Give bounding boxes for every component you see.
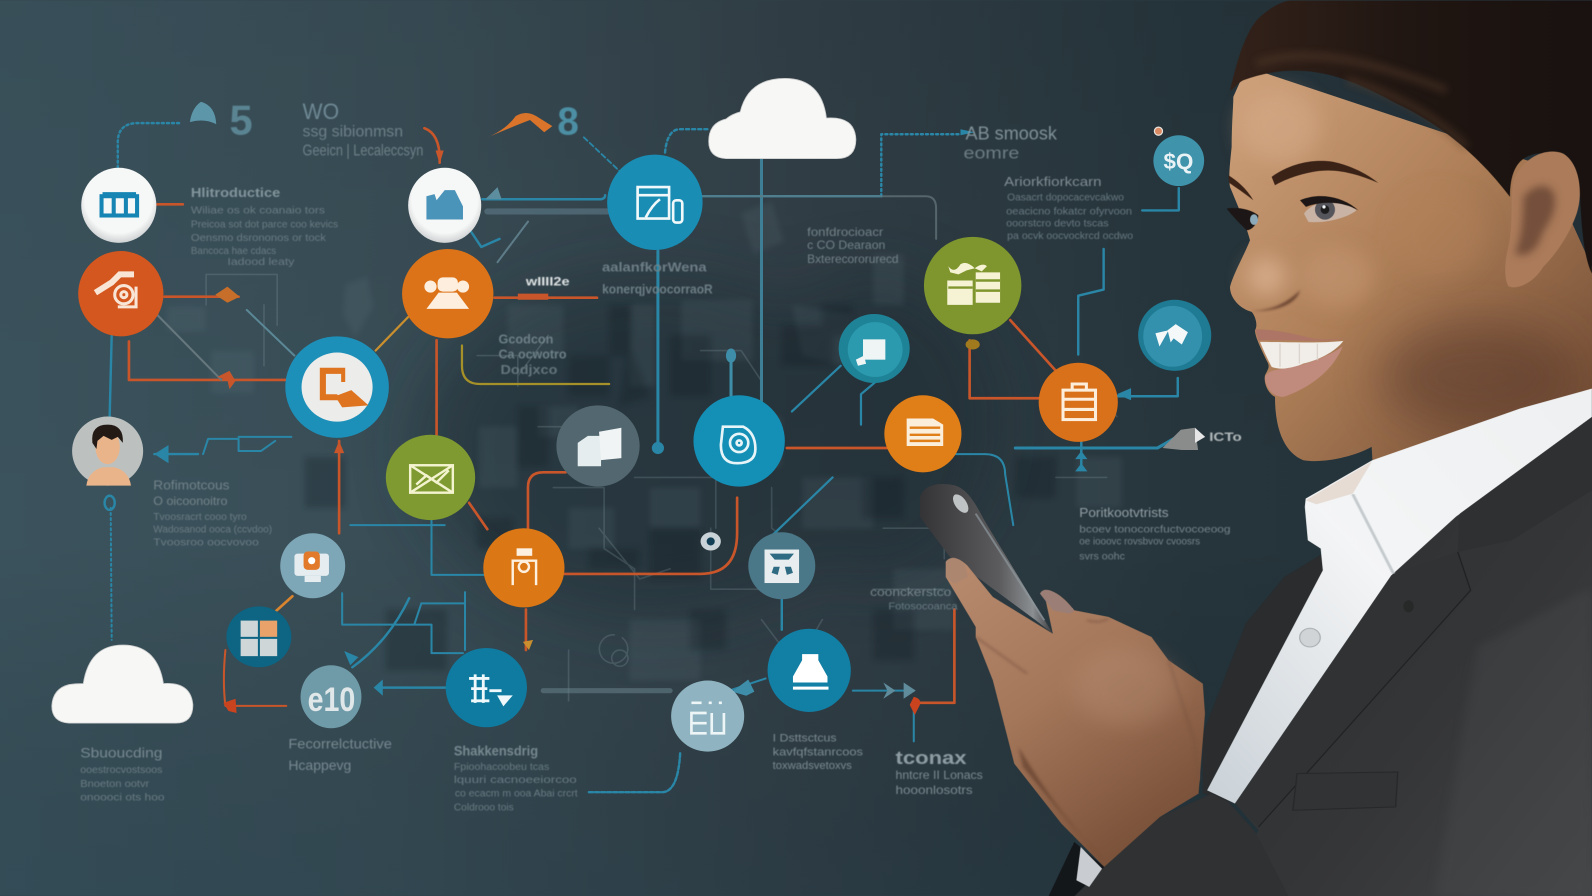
node: green files bbox=[924, 237, 1021, 334]
icon: numeral: e10 bbox=[308, 681, 355, 719]
text block: weight caption: toxwadsvetoxvs bbox=[773, 760, 852, 772]
node: teal picture bbox=[1138, 300, 1211, 371]
arrow heads and small markers bbox=[105, 102, 1205, 715]
icon: window grid bbox=[241, 621, 277, 656]
text block: upper centre: c CO Dearaon bbox=[807, 238, 885, 252]
node: pale database bbox=[671, 681, 744, 752]
text block: near phone: Fotosocoanca bbox=[888, 601, 958, 612]
small label: near grey marker: ICTo bbox=[1209, 430, 1242, 444]
text block: left lower: O oicoonoitro bbox=[153, 494, 228, 508]
hair bbox=[1230, 0, 1592, 274]
icon: weight bbox=[793, 654, 828, 690]
text block: introduction: Bancoca hae cdacs bbox=[191, 246, 276, 257]
node: grey-teal screen bbox=[748, 532, 815, 599]
connector lines bbox=[105, 102, 1205, 792]
node: orange scanner bbox=[483, 528, 565, 607]
text block: upper centre: Bxterecororurecd bbox=[807, 252, 899, 266]
text block: pale number caption bbox=[288, 737, 392, 774]
text block: centre left: Gcodcon bbox=[499, 331, 553, 346]
ear bbox=[1505, 152, 1580, 287]
text block: top note bbox=[303, 99, 423, 160]
orange connectors bbox=[129, 128, 1056, 706]
text block: introduction: Preicoa sot dot parce coo kevics bbox=[191, 220, 338, 231]
text block: left lower: Wadosanod ooca (ccvdoo) bbox=[153, 524, 272, 535]
text block: right of phone: bcoev tonocorcfuctvocoeoog bbox=[1079, 524, 1231, 535]
icon: scanner bbox=[513, 550, 536, 585]
jacket and shirt bbox=[1049, 389, 1592, 896]
text block: under bottom cloud: Bnoeton ootvr bbox=[80, 779, 150, 790]
node: grey files bbox=[556, 405, 640, 487]
text block: right of phone bbox=[1079, 505, 1231, 563]
sleeve bbox=[1074, 794, 1289, 896]
icon: person bbox=[86, 425, 131, 486]
text block: tconax: hntcre II Lonacs bbox=[896, 768, 983, 782]
text block: tools caption: co ecacm m ooa Abai crcrt bbox=[455, 788, 578, 799]
icon: clipboard bbox=[1063, 384, 1096, 420]
cloud: top bbox=[709, 78, 856, 159]
text block: introduction: Wiliae os ok coanaio tors bbox=[191, 205, 325, 216]
node: pale number bbox=[301, 665, 361, 728]
icon: window and cylinder bbox=[638, 187, 682, 223]
text block: introduction: Hlitroductice bbox=[191, 185, 280, 200]
hand bbox=[946, 558, 1205, 867]
node: dark teal grid bbox=[226, 606, 291, 667]
node: small teal bbox=[1153, 127, 1204, 186]
text block: tools caption: lquuri cacnoeeiorcoo bbox=[454, 775, 577, 786]
text block: centre bbox=[602, 259, 713, 297]
text block: top right notes bbox=[1004, 174, 1133, 242]
text block: upper centre: fonfdrocioacr bbox=[807, 225, 883, 239]
text block: top right notes: Oasacrt dopocacevcakwo bbox=[1007, 192, 1124, 203]
text block: under bottom cloud bbox=[80, 746, 165, 803]
node: orange machine bbox=[402, 249, 493, 338]
nostril shadow bbox=[1252, 290, 1300, 311]
text block: introduction: Iadood leaty bbox=[227, 257, 296, 268]
faint map backdrop bbox=[168, 201, 1122, 701]
text block: centre: aalanfkorWena bbox=[602, 259, 707, 274]
text block: top note: ssg sibionmsn bbox=[303, 123, 403, 140]
big number 8: 8 bbox=[557, 100, 579, 143]
text block: tconax: tconax bbox=[896, 747, 968, 768]
text block: top note: WO bbox=[303, 99, 339, 124]
node: blue target bbox=[693, 395, 785, 487]
node: white hand bbox=[408, 168, 481, 243]
mouth bbox=[1255, 329, 1347, 397]
text block: left lower bbox=[153, 478, 272, 548]
text block: tools caption bbox=[454, 744, 578, 813]
text block: pale number caption: Hcappevg bbox=[288, 758, 351, 774]
text block: top right notes: pa ocvk oocvockrcd ocdwo bbox=[1007, 231, 1133, 242]
icon: folder lines bbox=[907, 419, 943, 446]
text block: centre left: Ca ocwotro bbox=[499, 347, 567, 362]
text block: introduction: Oensmo dsrononos or tock bbox=[191, 233, 327, 244]
text block: under bottom cloud: Sbuoucding bbox=[80, 746, 162, 762]
phone bbox=[920, 484, 1053, 634]
text block: top right notes: Ariorkfiorkcarn bbox=[1004, 174, 1102, 189]
text block: right of phone: Poritkootvtrists bbox=[1079, 505, 1169, 520]
icon: building columns bbox=[102, 194, 137, 215]
node: person avatar bbox=[72, 417, 143, 486]
text block: centre: konerqjvoocorraoR bbox=[602, 282, 713, 297]
node: blue weight bbox=[768, 629, 851, 712]
text block: tools caption: Shakkensdrig bbox=[454, 744, 538, 760]
icon: tools bbox=[469, 674, 510, 704]
eyebrows bbox=[1228, 161, 1378, 200]
text block: top right notes: oeacicno fokatcr ofyrvoon bbox=[1006, 206, 1132, 217]
icon: projector bbox=[424, 277, 469, 309]
text block: weight caption: I Dsttsctcus bbox=[773, 732, 837, 744]
text block: top right heading: AB smoosk bbox=[966, 122, 1058, 143]
text block: weight caption bbox=[773, 732, 863, 772]
text block: top right notes: ooorstcro devto tscas bbox=[1006, 219, 1109, 230]
cloud: bottom bbox=[52, 645, 193, 723]
text block: weight caption: kavfqfstanrcoos bbox=[773, 747, 863, 759]
text block: tconax bbox=[896, 747, 983, 797]
text block: tools caption: Fpioohacoobeu tcas bbox=[454, 762, 549, 773]
icon: boxes bbox=[947, 263, 1000, 305]
big number 5: 5 bbox=[229, 96, 253, 143]
eyes bbox=[1227, 196, 1358, 230]
text block: centre left bbox=[499, 331, 567, 377]
text block: tools caption: Coldrooo tois bbox=[454, 802, 514, 813]
text block: right of phone: svrs oohc bbox=[1079, 552, 1125, 563]
text block: tconax: hooonlosotrs bbox=[896, 783, 973, 797]
text block: upper centre bbox=[807, 225, 899, 266]
icon: disc target bbox=[721, 427, 755, 463]
node: green chart bbox=[386, 435, 475, 520]
node: pale camera bbox=[280, 533, 345, 598]
curved white label: wIIII2e bbox=[525, 275, 570, 289]
face and neck bbox=[1227, 0, 1592, 475]
icon: blue skyline bbox=[426, 190, 463, 220]
node: blue ring with document bbox=[285, 336, 389, 438]
icon: shapes bbox=[1155, 324, 1188, 346]
node: orange files bbox=[884, 395, 961, 472]
text block: left lower: Tvoosracrt cooo tyro bbox=[153, 512, 247, 523]
text block: introduction bbox=[191, 185, 338, 268]
text block: pale number caption: Fecorrelctuctive bbox=[288, 737, 392, 753]
blue connectors bbox=[110, 123, 1186, 792]
text block: top note: Geeicn | Lecaleccsyn bbox=[303, 143, 423, 160]
node: orange clipboard bbox=[1039, 363, 1118, 442]
node: teal device bbox=[839, 314, 910, 383]
icon: orange document bbox=[320, 368, 369, 407]
node: blue chart bbox=[607, 155, 703, 250]
text block: top right heading bbox=[964, 122, 1058, 163]
gold and grey connectors bbox=[157, 196, 936, 691]
text block: left lower: Rofimotcous bbox=[153, 478, 230, 493]
text labels bbox=[80, 96, 1242, 813]
text block: under bottom cloud: onoooci ots hoo bbox=[80, 792, 165, 803]
text block: near phone: coonckerstco bbox=[870, 585, 952, 599]
icon: screen bbox=[765, 550, 799, 583]
text block: top right heading: eomre bbox=[964, 145, 1019, 163]
text block: near phone bbox=[870, 585, 958, 612]
icon: tablet bbox=[856, 339, 885, 366]
icon: glyphs: $Q bbox=[1164, 149, 1193, 174]
node: orange-red camera bbox=[78, 251, 163, 336]
icon: chart board bbox=[410, 465, 453, 493]
text block: centre left: Dodjxco bbox=[501, 362, 557, 377]
icon: database bbox=[691, 703, 724, 733]
node: white columns bbox=[81, 168, 156, 243]
icon: stacked files bbox=[578, 428, 621, 466]
icon: orange camera bbox=[294, 552, 329, 582]
text block: right of phone: oe iooovc rovsbvov cvoosrs bbox=[1079, 536, 1200, 547]
text block: left lower: Tvoosroo oocvovoo bbox=[153, 537, 259, 548]
icon: tape machine bbox=[95, 274, 136, 307]
text block: under bottom cloud: ooestrocvostsoos bbox=[80, 765, 162, 776]
node: blue tools bbox=[446, 648, 527, 727]
person: businesswoman bbox=[920, 0, 1592, 896]
